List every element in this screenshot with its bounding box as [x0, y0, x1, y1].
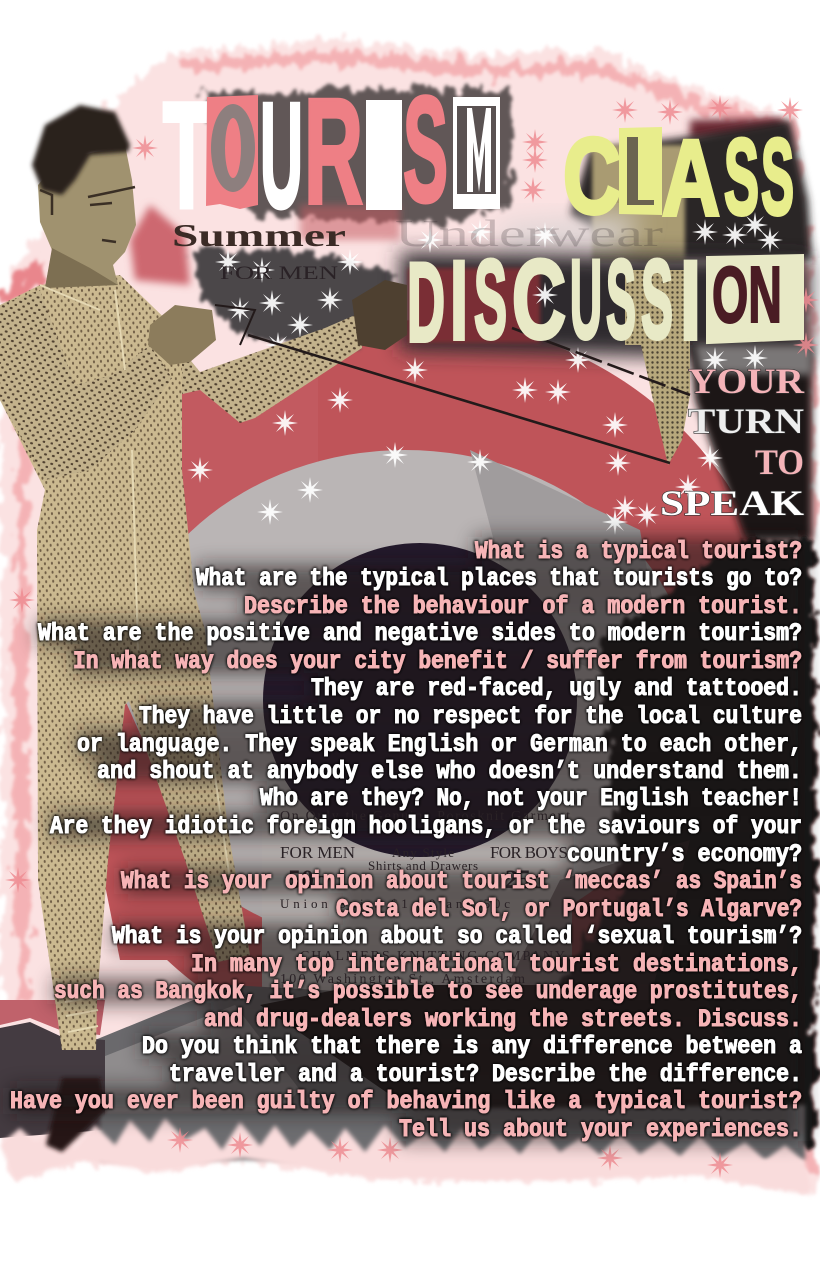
title: DISCUSSION: I	[680, 238, 701, 363]
title: CLASS	[563, 115, 794, 238]
foot	[46, 1078, 106, 1152]
panel: dark glow behind questions	[10, 537, 805, 1141]
heading: your turn to speak: TURN	[688, 401, 804, 441]
far hand	[352, 280, 407, 350]
newspaper ad patch	[262, 790, 572, 995]
text block: vintage ad small print: CHALMERS KNITTING COMPANY	[300, 949, 565, 964]
heading: your turn to speak	[660, 361, 805, 523]
tan halftone strip	[640, 340, 690, 465]
trim bands	[40, 285, 230, 1032]
text block: vintage ad small print: On Only the Genuine Porosknit Garment	[280, 809, 570, 824]
title: DISCUSSION: U	[570, 237, 602, 362]
letter M	[453, 97, 500, 209]
title: CLASS: A	[662, 117, 720, 238]
icon: man in mesh underwear	[0, 105, 407, 1152]
panel: sparkles	[187, 212, 783, 535]
text block: vintage ad small print	[280, 809, 570, 987]
title: TOURISM: U	[260, 71, 303, 239]
title: DISCUSSION: I	[450, 238, 468, 363]
title: DISCUSSION: S	[641, 237, 673, 362]
icon: grey record disc	[115, 450, 695, 950]
grey triangle shade on disc	[470, 450, 670, 700]
title: TOURISM: S	[403, 65, 448, 233]
panel: dark smudges top	[190, 88, 812, 540]
text block: vintage ad small print: FOR MEN	[280, 843, 355, 862]
heading: your turn to speak: YOUR	[688, 361, 805, 401]
text block: vintage ad headline: Summer	[172, 217, 346, 253]
title: CLASS: C	[563, 115, 621, 236]
near arm sleeve	[0, 290, 172, 480]
red between the legs	[100, 700, 250, 960]
text block: discussion questions	[10, 537, 802, 1144]
text block: vintage ad headline	[172, 213, 664, 284]
text block: vintage ad headline: Underwear	[395, 213, 664, 255]
neck shadow	[45, 248, 118, 288]
head	[38, 145, 136, 288]
near hand	[148, 305, 216, 365]
letter O block	[206, 95, 258, 209]
title: CLASS: S	[724, 116, 759, 237]
panel: red collage shapes and vinyl record	[0, 205, 790, 1060]
arrow: fishing rod line	[215, 305, 690, 463]
letter L block	[621, 129, 660, 213]
title: DISCUSSION: S	[474, 237, 507, 362]
title: DISCUSSION: C	[512, 237, 566, 362]
torso and front leg	[0, 275, 195, 1050]
title: TOURISM	[163, 65, 500, 239]
title: DISCUSSION	[407, 237, 802, 365]
text block: vintage ad small print: Shirts and Drawers	[368, 858, 478, 873]
heading: your turn to speak: TO	[755, 442, 804, 482]
text block: vintage ad small print: 25c	[505, 865, 543, 894]
text block: vintage ad small print: FOR BOYS	[490, 843, 568, 862]
back leg	[125, 560, 250, 962]
red panel behind the arm	[178, 375, 318, 575]
letter T: T	[163, 71, 210, 239]
text block: vintage ad small print: Union Suits $1.00 and 50c	[280, 896, 510, 911]
text block: vintage ad headline: FOR MEN	[220, 263, 338, 284]
text block: vintage ad small print: Any Style	[392, 845, 454, 860]
panel: jagged torn bottom edge	[0, 1118, 812, 1195]
text block: vintage ad small print: 100 Washington St., Amsterdam	[280, 972, 525, 987]
heading: your turn to speak: SPEAK	[660, 483, 804, 523]
sleeve: outstretched arm	[170, 312, 362, 423]
face features	[40, 187, 135, 242]
icon: dark record label	[263, 543, 577, 857]
panel: dark smudges lower	[0, 540, 815, 1160]
title: DISCUSSION: D	[407, 240, 445, 365]
hair	[32, 105, 130, 195]
letter R: R	[304, 67, 363, 235]
letter I	[366, 100, 402, 210]
title: DISCUSSION: S	[606, 237, 636, 362]
text block: vintage ad small print: 50c	[288, 865, 326, 894]
